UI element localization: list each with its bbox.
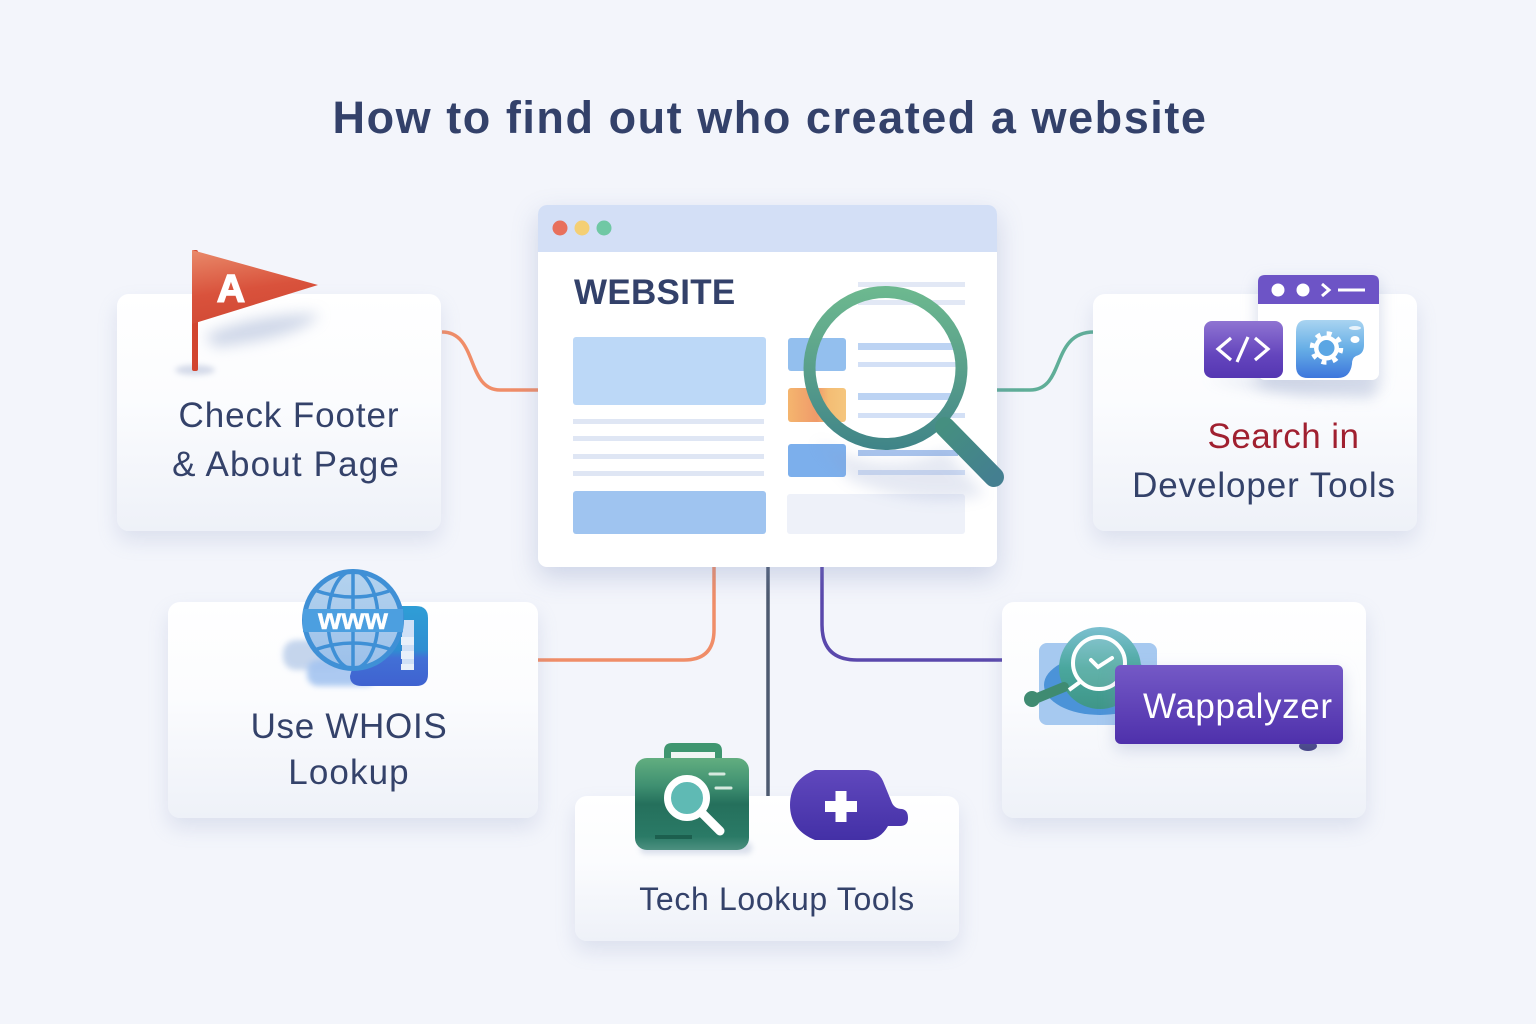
connector: footer: [442, 332, 540, 390]
website heading: WEBSITE: [574, 273, 736, 312]
connector: tech lookup: [766, 566, 770, 798]
icon: wappalyzer badge: [1024, 627, 1343, 751]
developer tools label: [1132, 417, 1396, 505]
title: How to find out who created a website: [333, 92, 1207, 143]
footer label: [172, 396, 400, 484]
connector: whois: [538, 566, 714, 660]
panel: whois: [168, 602, 538, 818]
browser dots: [552, 220, 612, 236]
footer label: Check Footer: [179, 396, 399, 435]
icon: purple plus tag: [790, 770, 908, 840]
panel: wappalyzer: [1002, 602, 1366, 818]
icon: magnifying glass: [810, 292, 994, 477]
connector: developer tools: [996, 332, 1094, 390]
whois label: Lookup: [288, 753, 410, 792]
panel: developer tools: [1093, 294, 1417, 531]
icon: www globe: www: [317, 603, 389, 636]
whois label: [251, 707, 447, 792]
icon: developer tools: [1204, 275, 1380, 398]
page layout blocks: [573, 282, 965, 534]
browser title bar: [538, 205, 997, 252]
icon: flag: A: [217, 268, 245, 311]
developer tools label: Search in: [1208, 417, 1359, 456]
icon: wappalyzer badge: Wappalyzer: [1143, 687, 1332, 726]
tech lookup label: Tech Lookup Tools: [639, 881, 915, 917]
icon: green briefcase: [635, 743, 752, 854]
whois label: Use WHOIS: [251, 707, 447, 746]
icon: www globe: [283, 571, 428, 686]
icon: flag: [175, 250, 320, 375]
footer label: & About Page: [172, 445, 400, 484]
connector: wappalyzer: [822, 566, 1003, 660]
panel: tech lookup: [575, 796, 959, 941]
panel: footer: [117, 294, 441, 531]
developer tools label: Developer Tools: [1132, 466, 1396, 505]
magnifier shadow: [815, 440, 985, 500]
browser window: [538, 205, 997, 567]
